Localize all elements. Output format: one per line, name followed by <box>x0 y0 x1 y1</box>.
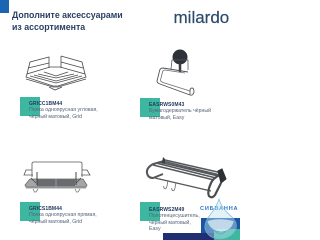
teal block: product 4 <box>140 202 160 221</box>
teal block: product 2 <box>140 98 160 117</box>
logo: milardo: milardo <box>174 8 229 27</box>
text: product 4: Easy <box>149 226 161 232</box>
text: product 3 <box>29 206 97 225</box>
text: product 3: чёрный матовый, Grid <box>29 219 82 225</box>
navy bar <box>163 233 240 240</box>
title: из ассортимента <box>12 22 85 32</box>
title <box>12 10 123 32</box>
icon: corner shelf <box>26 56 86 90</box>
text: product 2: EASRWS0M43 <box>149 102 184 108</box>
text: product 1: Полка одноярусная угловая, <box>29 107 98 113</box>
text: product 1: GRICC1BM44 <box>29 101 62 107</box>
text: product 2: матовый, Easy <box>149 115 184 121</box>
icon: toilet paper holder <box>156 50 194 96</box>
teal block: product 1 <box>20 97 40 116</box>
icon: towel rack <box>146 157 227 198</box>
blue block <box>201 218 240 233</box>
text: product 4: чёрный матовый, <box>149 220 191 226</box>
text: product 2: Бумагодержатель чёрный <box>149 108 211 114</box>
text: product 4: Полотенцесушитель, <box>149 213 200 219</box>
title: Дополните аксессуарами <box>12 10 123 20</box>
text: product 3: Полка одноярусная прямая, <box>29 212 97 218</box>
text: product 3: GRICS1BM44 <box>29 206 62 212</box>
brand text: Сибванна: СИБВАННА <box>200 206 238 212</box>
teal corner block <box>214 229 240 240</box>
text: product 2 <box>149 102 211 121</box>
text: product 1 <box>29 101 98 120</box>
text: product 1: чёрный матовый, Grid <box>29 114 82 120</box>
icon: water drop with basin <box>204 198 237 240</box>
corner accent block <box>0 0 9 13</box>
icon: straight shelf <box>24 162 91 192</box>
teal block: product 3 <box>20 202 40 221</box>
text: product 4 <box>149 207 200 232</box>
text: product 4: EASRWS2M49 <box>149 207 184 213</box>
